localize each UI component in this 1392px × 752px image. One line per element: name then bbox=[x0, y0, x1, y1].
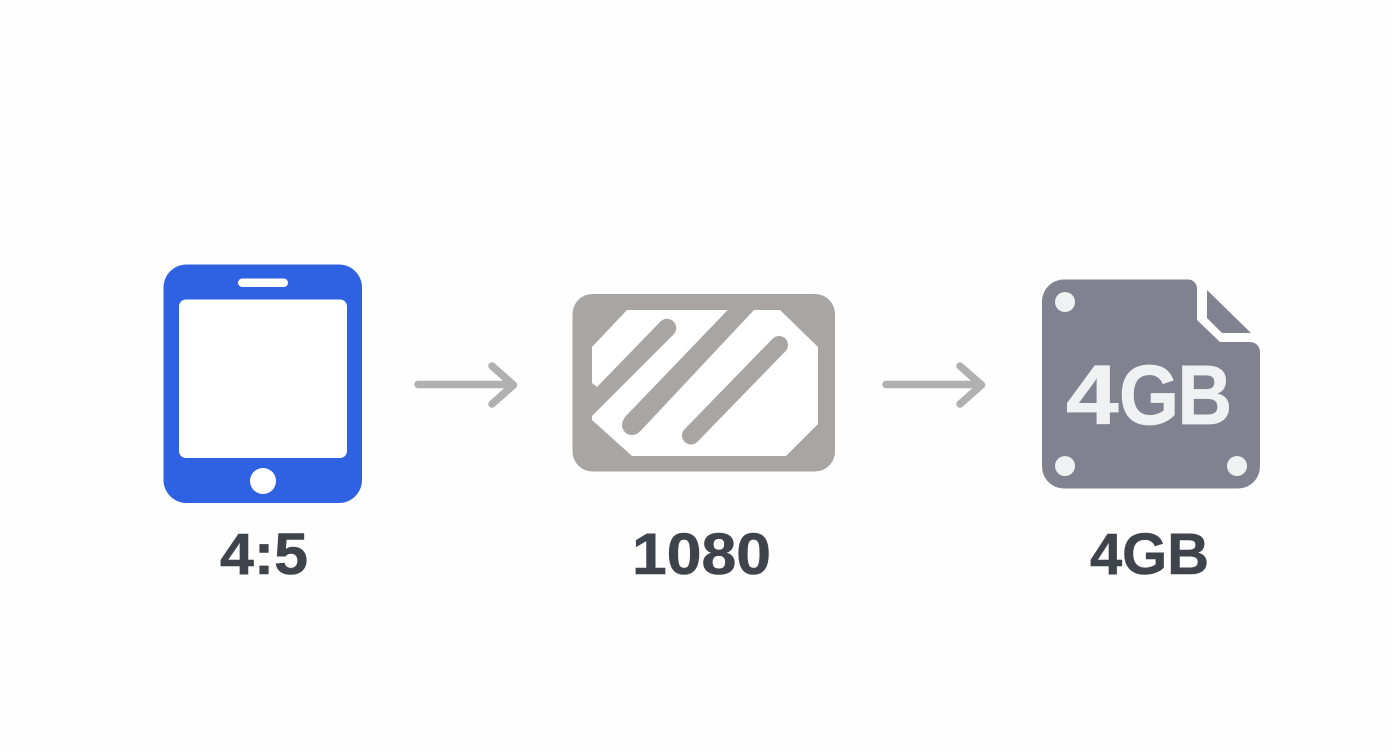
icon text: 4GB: 4 bbox=[1066, 348, 1119, 442]
icon text: 4GB: G bbox=[1119, 348, 1179, 442]
label: 1080: 1080 bbox=[632, 522, 771, 587]
icon text: 4GB: B bbox=[1178, 348, 1232, 442]
label: 4:5: 4:5 bbox=[220, 522, 308, 587]
arrow: phone to resolution bbox=[418, 366, 514, 404]
icon: image card bbox=[572, 294, 835, 472]
icon: phone bbox=[164, 264, 362, 503]
icon: file with 4GB bbox=[1042, 280, 1260, 488]
arrow: resolution to file size bbox=[886, 366, 982, 404]
label: 4GB: 4GB bbox=[1090, 522, 1209, 587]
icon text: 4GB bbox=[1066, 348, 1232, 442]
